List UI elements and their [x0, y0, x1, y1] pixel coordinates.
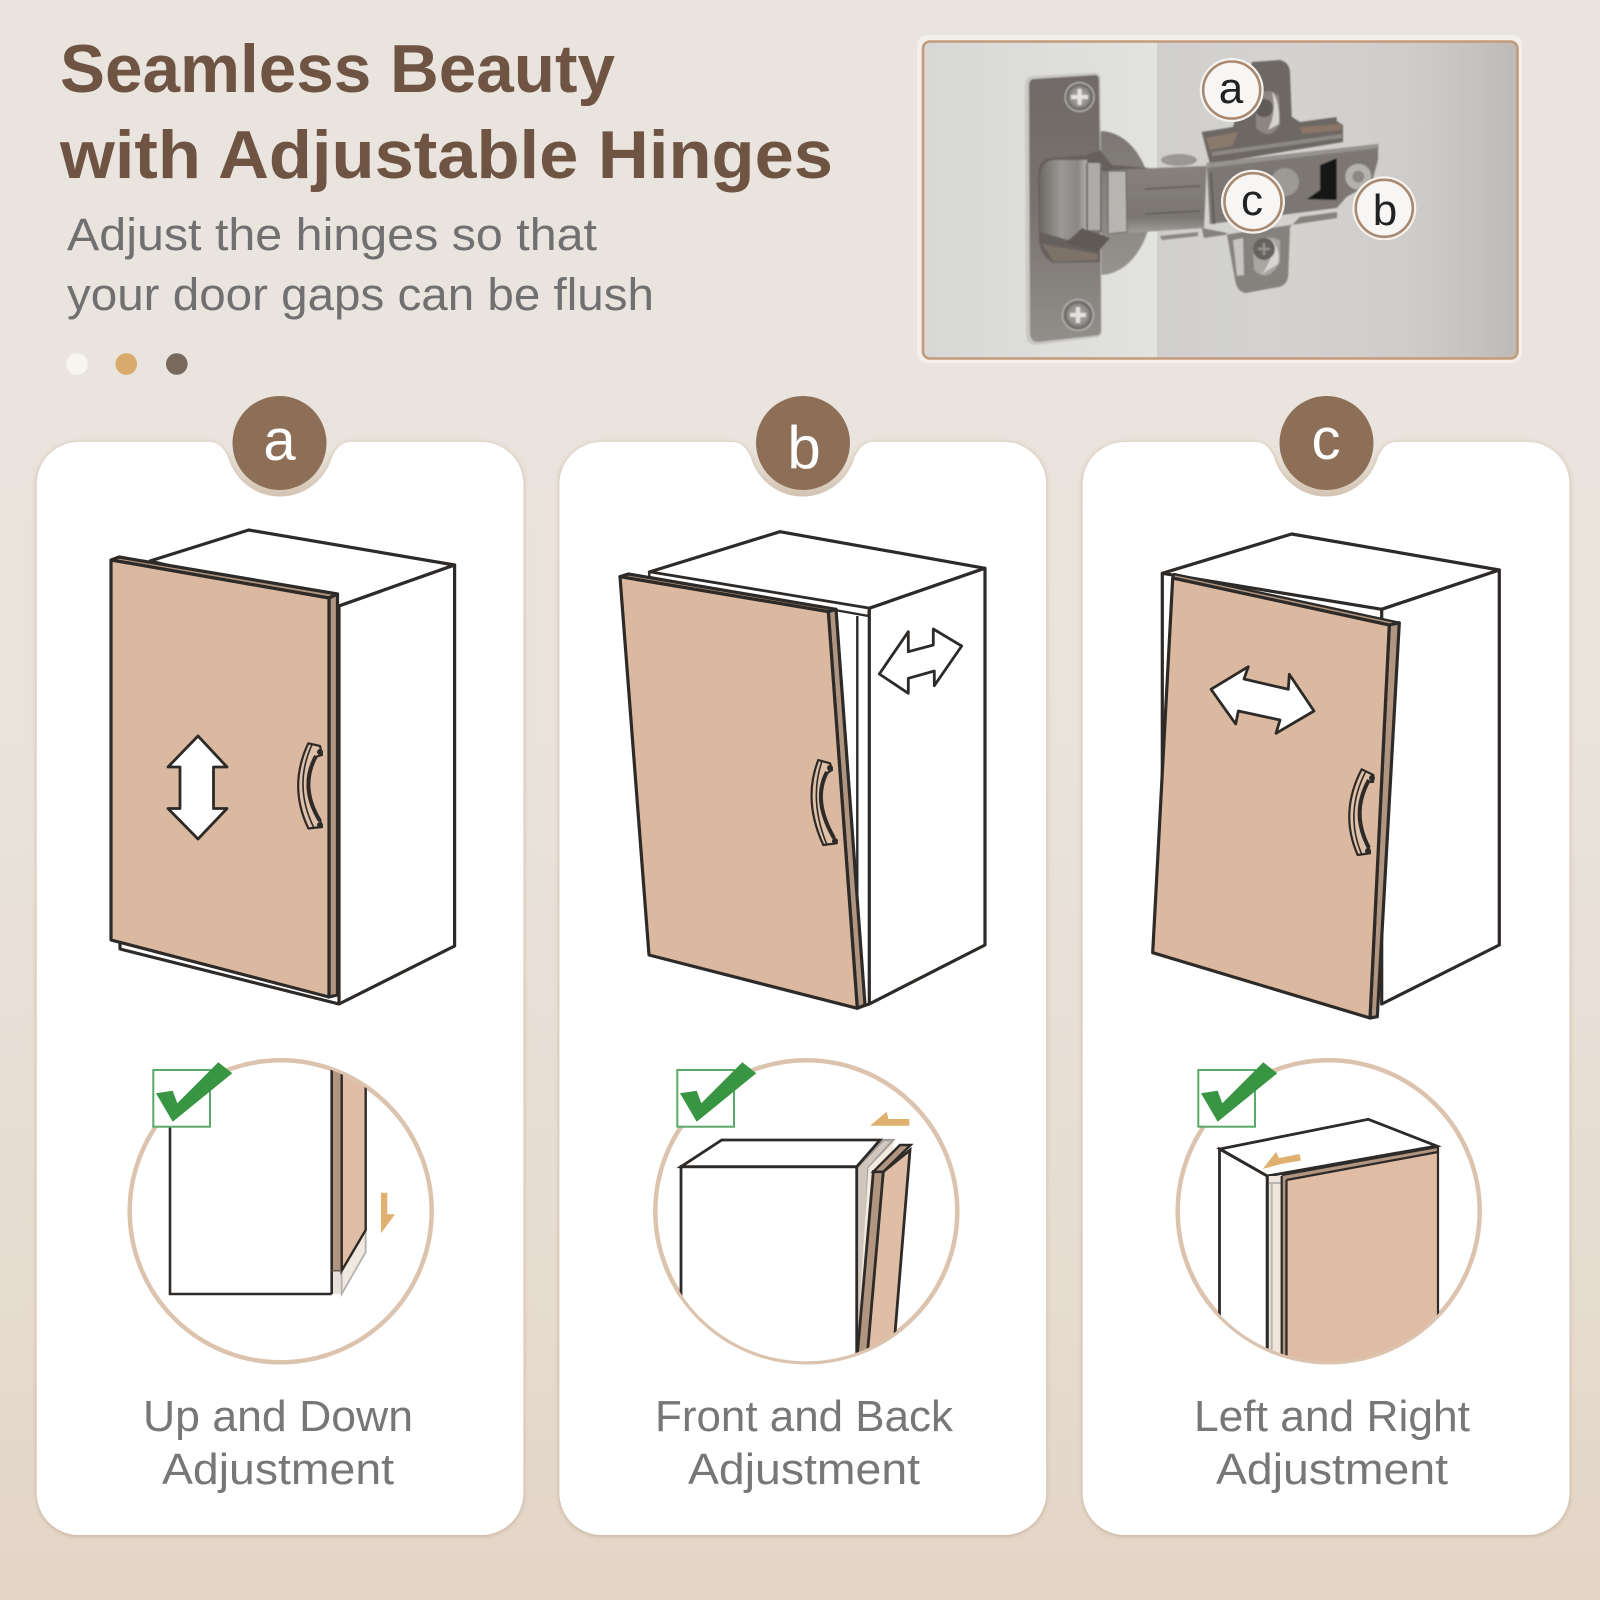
cabinet b: [620, 532, 985, 1008]
handle b: [812, 760, 838, 845]
caption b: Front and Back: [655, 1392, 954, 1441]
arrow left-right: [1211, 667, 1314, 733]
arrow up-down: [168, 736, 227, 839]
subtitle: [67, 209, 654, 320]
arrow front-back: [879, 629, 962, 693]
check mark: [1198, 1062, 1277, 1127]
label a on photo: a: [1219, 64, 1244, 113]
subtitle: Adjust the hinges so that: [67, 209, 598, 260]
label b on photo: b: [1373, 186, 1397, 235]
badge a: a: [263, 408, 296, 473]
label c on photo: [1221, 170, 1285, 234]
label b on photo: [1352, 176, 1416, 240]
caption a: Adjustment: [162, 1445, 394, 1494]
detail circle c: [1178, 1060, 1480, 1370]
badge c: [1273, 390, 1379, 496]
caption a: [143, 1392, 413, 1494]
caption b: Adjustment: [688, 1445, 920, 1494]
handle a: [298, 743, 323, 828]
detail circle b: [655, 1060, 957, 1370]
handle c: [1349, 769, 1375, 855]
colour dots: [66, 353, 188, 375]
subtitle: your door gaps can be flush: [67, 269, 654, 320]
offset arrow down: [381, 1193, 395, 1233]
offset arrow left: [870, 1112, 909, 1126]
title: [59, 31, 833, 193]
check mark: [153, 1062, 232, 1127]
detail circle a: [130, 1060, 432, 1362]
label c on photo: c: [1241, 176, 1263, 225]
label a on photo: [1200, 58, 1264, 122]
badge b: b: [787, 414, 821, 481]
caption c: [1194, 1392, 1470, 1494]
cabinet c: [1153, 534, 1499, 1018]
offset arrow left: [1263, 1152, 1301, 1169]
title: Seamless Beauty: [60, 31, 615, 107]
caption c: Adjustment: [1216, 1445, 1448, 1494]
badge c: c: [1312, 407, 1340, 472]
cabinet a: [111, 530, 455, 1004]
badge b: [750, 390, 856, 496]
caption b: [655, 1392, 954, 1494]
caption a: Up and Down: [143, 1392, 413, 1441]
caption c: Left and Right: [1194, 1392, 1470, 1441]
panel: b front and back: [559, 390, 1046, 1535]
title: with Adjustable Hinges: [59, 117, 833, 193]
badge a: [227, 390, 333, 496]
panel: a up and down: [37, 390, 523, 1535]
photo panel: hinge: [917, 35, 1522, 363]
check mark: [677, 1062, 756, 1127]
panel: c left and right: [1083, 390, 1570, 1535]
